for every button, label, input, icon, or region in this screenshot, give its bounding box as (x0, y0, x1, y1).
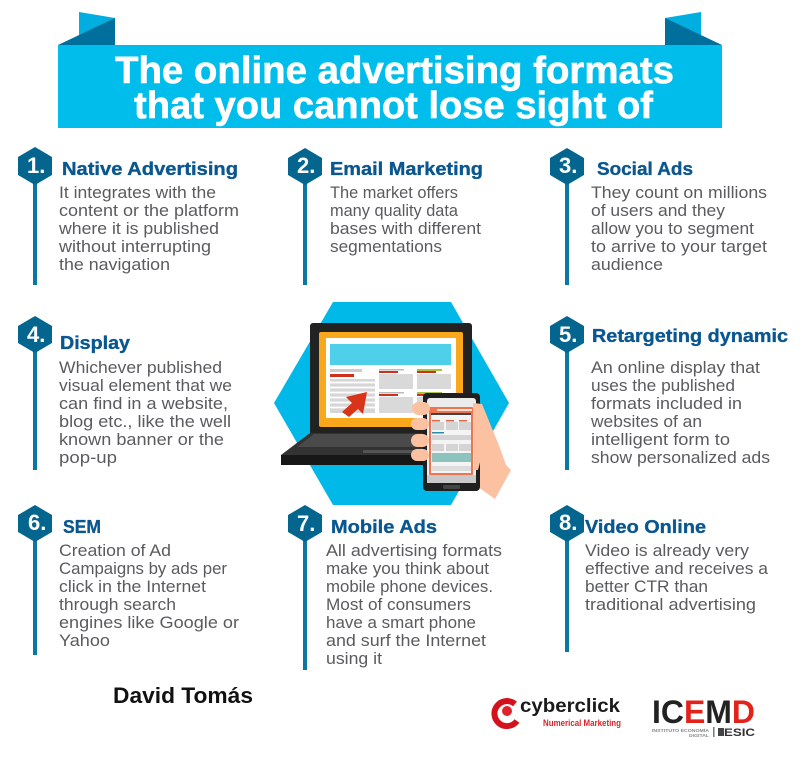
panel: 6 sem: engines like Google or (59, 613, 239, 632)
panel: 3 social ads (550, 148, 767, 285)
panel: 1 native advertising: Native Advertising (62, 158, 238, 179)
logo: cyberclick (494, 696, 621, 729)
panel: 4 display: blog etc., like the well (59, 412, 231, 431)
panel: 8 video online: Video is already very (585, 541, 750, 560)
title: that you cannot lose sight of (134, 85, 653, 127)
hexagon background (274, 302, 509, 505)
icon: cyberclick swirl (494, 701, 517, 726)
panel: 6 sem (18, 505, 239, 655)
panel: 6 sem: Yahoo (59, 631, 110, 650)
panel: 6 sem: SEM (63, 516, 101, 537)
logo: ICEMD ESIC: INSTITUTO ECONOMÍA (652, 726, 710, 733)
panel: 2 email marketing: bases with different (330, 219, 481, 238)
logo: ICEMD ESIC: ESIC (724, 727, 755, 739)
panel: 3 social ads: allow you to segment (591, 219, 754, 238)
panel: 7 mobile ads (288, 505, 502, 670)
phone (423, 393, 480, 491)
hand: palm behind phone edge (474, 404, 511, 499)
panel: 7 mobile ads: 7. (297, 511, 315, 536)
title: The online advertising formats (115, 50, 674, 92)
panel: 1 native advertising: It integrates with the (59, 183, 216, 202)
panel: 7 mobile ads: All advertising formats (326, 541, 502, 560)
panel: 4 display: Display (60, 332, 131, 353)
panel: 8 video online: better CTR than (585, 577, 708, 596)
panel: 2 email marketing (288, 148, 483, 285)
panel: 3 social ads: 3. (559, 153, 577, 178)
panel: 6 sem: through search (59, 595, 176, 614)
title (115, 50, 674, 127)
panel: 4 display: known banner or the (59, 430, 224, 449)
panel: 8 video online: 8. (559, 510, 577, 535)
panel: 5 retargeting dynamic: websites of an (590, 412, 702, 431)
panel: 4 display: 4. (27, 322, 45, 347)
panel: 1 native advertising: where it is published (58, 219, 219, 238)
panel: 5 retargeting dynamic: 5. (559, 322, 577, 347)
panel: 3 social ads: of users and they (591, 201, 726, 220)
panel: 1 native advertising: content or the platform (59, 201, 239, 220)
panel: 6 sem: click in the Internet (59, 577, 206, 596)
panel: 5 retargeting dynamic: show personalized ads (591, 448, 770, 467)
panel: 5 retargeting dynamic: uses the published (591, 376, 735, 395)
panel: 7 mobile ads: and surf the Internet (326, 631, 486, 650)
panel: 6 sem: Creation of Ad (59, 541, 171, 560)
laptop (281, 323, 472, 465)
panel: 2 email marketing: Email Marketing (330, 158, 483, 179)
panel: 7 mobile ads: Most of consumers (326, 595, 471, 614)
panel: 2 email marketing: segmentations (330, 237, 442, 256)
panel: 7 mobile ads: Mobile Ads (331, 516, 437, 537)
title banner (58, 12, 722, 128)
hand: fingers and palm over phone (411, 402, 490, 470)
panel: 3 social ads: Social Ads (597, 158, 693, 179)
panel: 1 native advertising (18, 147, 239, 285)
panel: 2 email marketing: 2. (297, 153, 315, 178)
logo: ICEMD ESIC: DIGITAL (689, 733, 709, 738)
panel: 4 display: visual element that we (59, 376, 232, 395)
panel: 6 sem: Campaigns by ads per (59, 559, 227, 578)
logo: cyberclick: Numerical Marketing (543, 718, 621, 729)
panel: 5 retargeting dynamic: intelligent form to (591, 430, 730, 449)
author name: David Tomás (113, 683, 253, 708)
panel: 7 mobile ads: make you think about (326, 559, 489, 578)
panel: 7 mobile ads: have a smart phone (326, 613, 476, 632)
panel: 5 retargeting dynamic (550, 316, 788, 470)
panel: 6 sem: 6. (28, 510, 46, 535)
logo: cyberclick: cyberclick (520, 696, 620, 717)
panel: 7 mobile ads: using it (326, 649, 382, 668)
logo: ICEMD ESIC: ICEMD (652, 694, 755, 730)
panel: 5 retargeting dynamic: formats included in (591, 394, 742, 413)
panel: 1 native advertising: without interrupting (58, 237, 211, 256)
panel: 1 native advertising: the navigation (59, 255, 170, 274)
panel: 7 mobile ads: mobile phone devices. (326, 577, 493, 596)
panel: 8 video online (550, 505, 769, 652)
panel: 1 native advertising: 1. (27, 153, 45, 178)
panel: 8 video online: effective and receives a (585, 559, 769, 578)
panel: 3 social ads: audience (591, 255, 663, 274)
panel: 3 social ads: They count on millions (591, 183, 767, 202)
panel: 4 display: can find in a website, (59, 394, 228, 413)
illustration: laptop and phone on hexagon (274, 302, 511, 505)
panel: 5 retargeting dynamic: An online display that (591, 358, 760, 377)
panel: 2 email marketing: many quality data (330, 201, 459, 220)
panel: 8 video online: Video Online (585, 516, 706, 537)
panel: 3 social ads: to arrive to your target (591, 237, 767, 256)
panel: 5 retargeting dynamic: Retargeting dynamic (592, 325, 788, 346)
panel: 4 display: Whichever published (59, 358, 222, 377)
panel: 4 display: pop-up (59, 448, 117, 467)
panel: 2 email marketing: The market offers (330, 183, 458, 202)
panel: 8 video online: traditional advertising (585, 595, 756, 614)
panel: 4 display (18, 316, 232, 470)
